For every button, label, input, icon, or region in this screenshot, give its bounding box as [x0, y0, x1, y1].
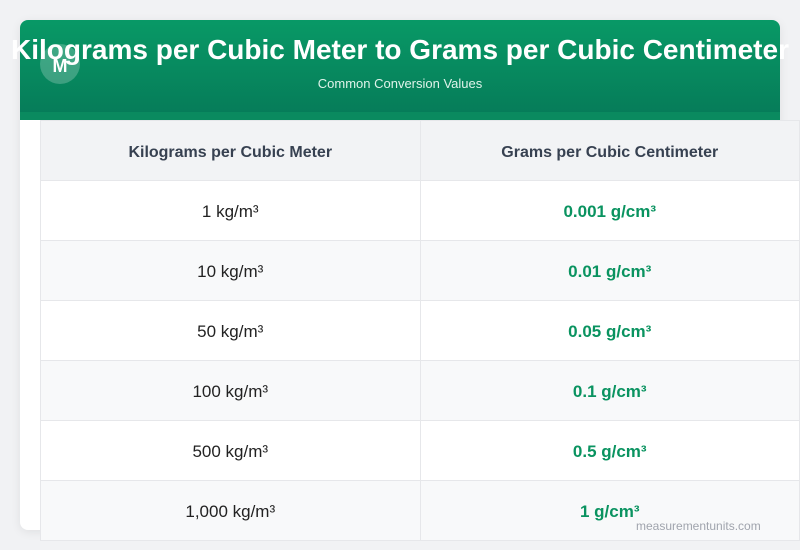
header banner: [20, 20, 780, 120]
conversion table: 10 kg/m³: [197, 262, 263, 281]
conversion table: 100 kg/m³: [192, 382, 268, 401]
conversion table: 1 kg/m³: [202, 202, 259, 221]
conversion table: 0.01 g/cm³: [568, 262, 651, 281]
conversion table: Kilograms per Cubic Meter: [128, 144, 332, 161]
conversion table: 50 kg/m³: [197, 322, 263, 341]
conversion table: 1,000 kg/m³: [185, 502, 275, 521]
watermark: measurementunits.com: [636, 519, 761, 533]
title: Kilograms per Cubic Meter to Grams per Cubic Centimeter: [11, 34, 789, 65]
conversion table: 500 kg/m³: [192, 442, 268, 461]
conversion table: 0.05 g/cm³: [568, 322, 651, 341]
conversion table: 1 g/cm³: [580, 502, 640, 521]
conversion table: [40, 120, 800, 541]
icon: logo circle: M: [52, 56, 68, 76]
conversion table: Grams per Cubic Centimeter: [501, 144, 718, 161]
subtitle: Common Conversion Values: [318, 76, 482, 91]
conversion table: 0.5 g/cm³: [573, 442, 647, 461]
conversion table: 0.1 g/cm³: [573, 382, 647, 401]
icon: logo circle: [40, 44, 80, 84]
conversion table: 0.001 g/cm³: [563, 202, 656, 221]
